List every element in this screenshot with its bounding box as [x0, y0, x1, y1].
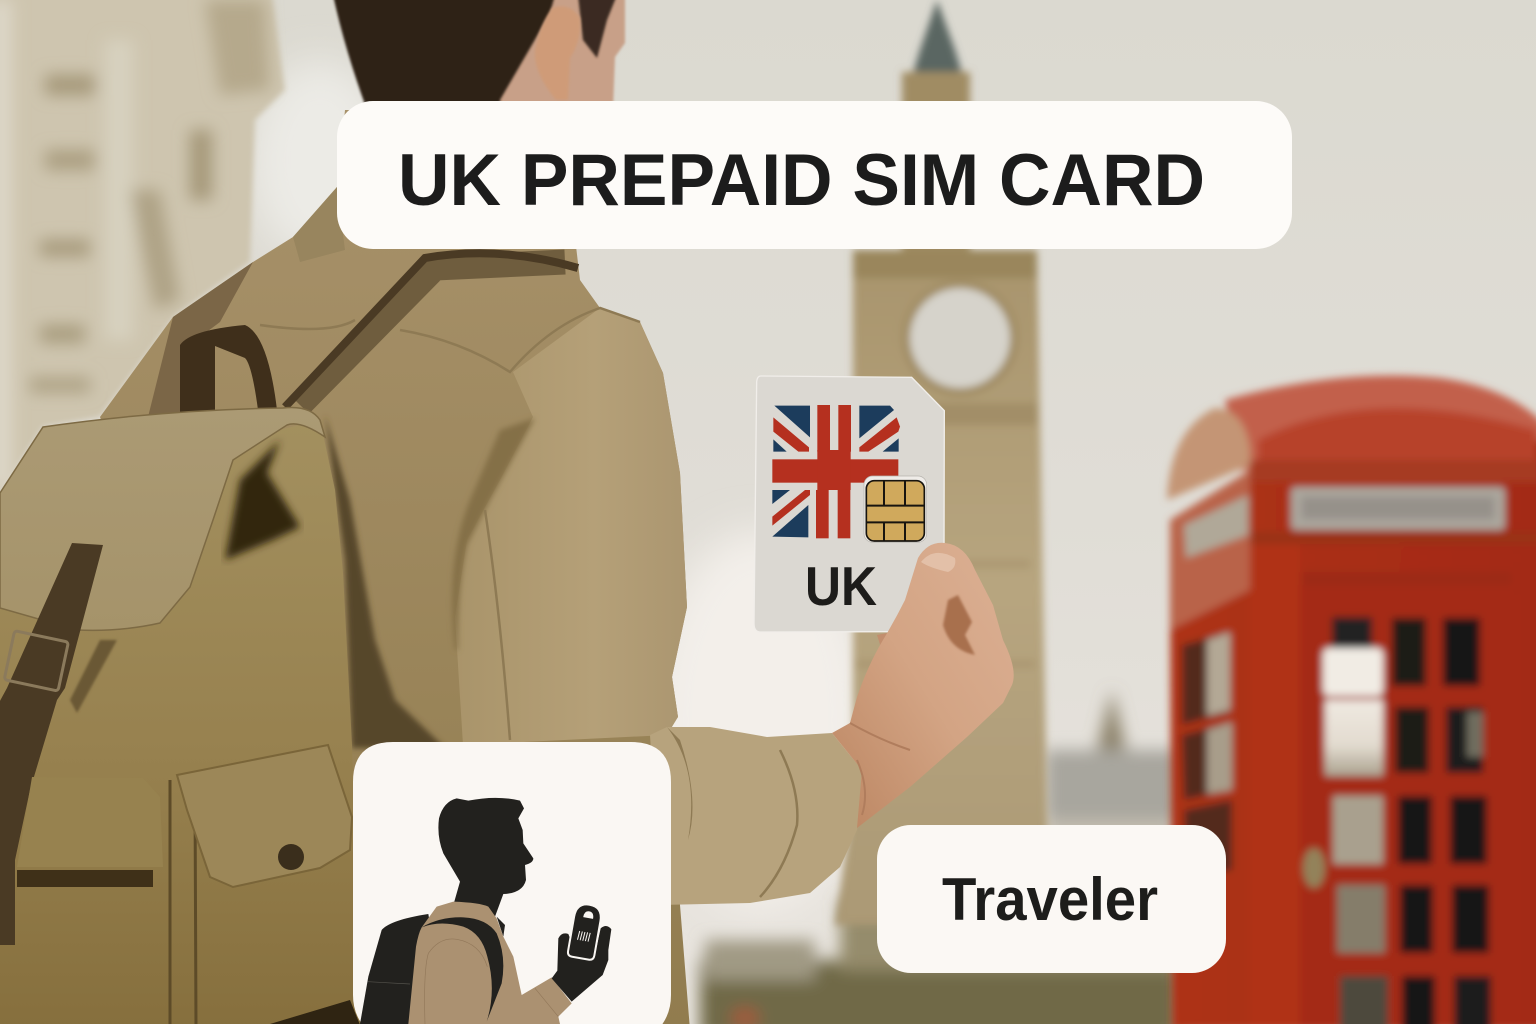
palm shadow: [943, 595, 975, 655]
diagonal shadow on pack: [70, 640, 117, 713]
title panel: [337, 101, 1292, 249]
backpack: [0, 253, 578, 1024]
shadow under flap: [225, 440, 300, 560]
phone box front sign: [1291, 487, 1505, 530]
icon: jacket torso: [408, 902, 572, 1024]
icon: clock face: [910, 288, 1010, 388]
side windows: [1182, 632, 1232, 878]
jacket back: [100, 110, 690, 1024]
jacket underarm crease: [452, 418, 535, 650]
icon: backpack silhouette: [360, 914, 447, 1024]
background: distant buildings and trees: [700, 690, 1180, 1024]
backpack left pocket: [17, 777, 163, 867]
left pocket zipper: [17, 870, 153, 887]
title: UK PREPAID SIM CARD: [398, 140, 1205, 221]
strap dark edge: [285, 253, 578, 407]
icon: head silhouette: [438, 798, 533, 917]
background: red telephone box: [1167, 376, 1536, 1024]
phone box door frame: [1300, 585, 1510, 1024]
UK flag: [772, 405, 900, 538]
icon: backpack strap: [422, 917, 503, 1022]
phone box pediment: [1258, 408, 1536, 462]
traveler silhouette panel: [353, 742, 671, 1024]
backpack pocket button: [278, 844, 304, 870]
jacket sleeve: [650, 727, 862, 905]
phone box roof: [1225, 376, 1536, 470]
background: Big Ben clock tower: [835, 0, 1052, 925]
backpack right pocket flap: [177, 745, 352, 887]
man: head and hair: [333, 0, 625, 110]
icon: phone with SIM: [567, 902, 603, 961]
SIM card held up: [754, 376, 944, 632]
backpack shoulder strap: [300, 262, 565, 405]
man: hand holding SIM card: [832, 543, 1014, 828]
dark hem of jacket at bottom: [270, 1000, 362, 1024]
backpack top handle: [180, 325, 277, 420]
backpack back strap: [148, 262, 253, 417]
phone box main body: [1170, 440, 1536, 1024]
background: blurred building on left: [0, 0, 285, 500]
phone box door knob: [1303, 848, 1325, 888]
gap shadow between pack and jacket: [325, 415, 445, 748]
traveler label panel: [877, 825, 1226, 973]
phone box side dome: [1167, 408, 1250, 500]
backpack flap: [0, 408, 325, 630]
SIM card UK label: UK: [805, 555, 877, 617]
icon: hand: [552, 926, 611, 1002]
SIM chip: [864, 476, 927, 542]
sleeve cuff seam: [760, 750, 797, 897]
traveler label: Traveler: [942, 866, 1158, 933]
man: jacket: [100, 110, 862, 1024]
backpack buckle strap: [0, 543, 103, 945]
door window panes: [1323, 617, 1491, 1024]
jacket arm: [455, 308, 687, 745]
SIM card body: [754, 376, 944, 632]
jacket yoke seam: [400, 308, 640, 372]
phone box side sign: [1184, 495, 1248, 558]
thumb nail: [921, 553, 955, 572]
backpack body: [0, 420, 362, 1024]
jacket collar: [293, 187, 345, 262]
